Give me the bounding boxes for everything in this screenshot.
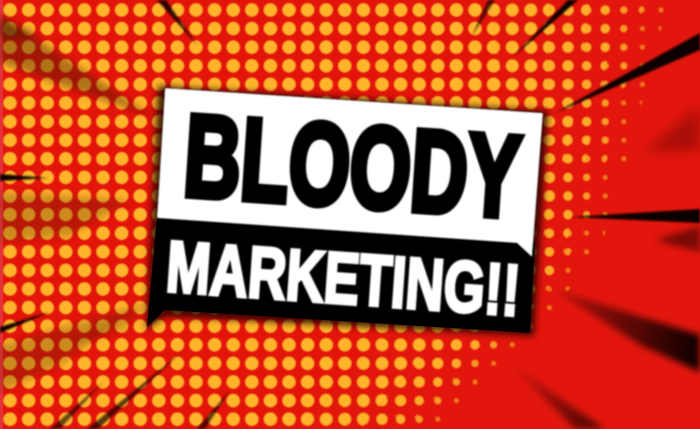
soft shadow rays on the left [0, 14, 155, 392]
heading: BLOODY: BLOODY [180, 90, 524, 242]
heading: MARKETING!!: MARKETING!! [164, 227, 523, 332]
speech banner [146, 86, 548, 336]
banner shadow [146, 86, 548, 336]
soft shadow rays on the right [512, 105, 700, 429]
left edge tint [0, 0, 3, 429]
white upper panel [157, 88, 543, 257]
black lower panel with tail [147, 216, 535, 333]
